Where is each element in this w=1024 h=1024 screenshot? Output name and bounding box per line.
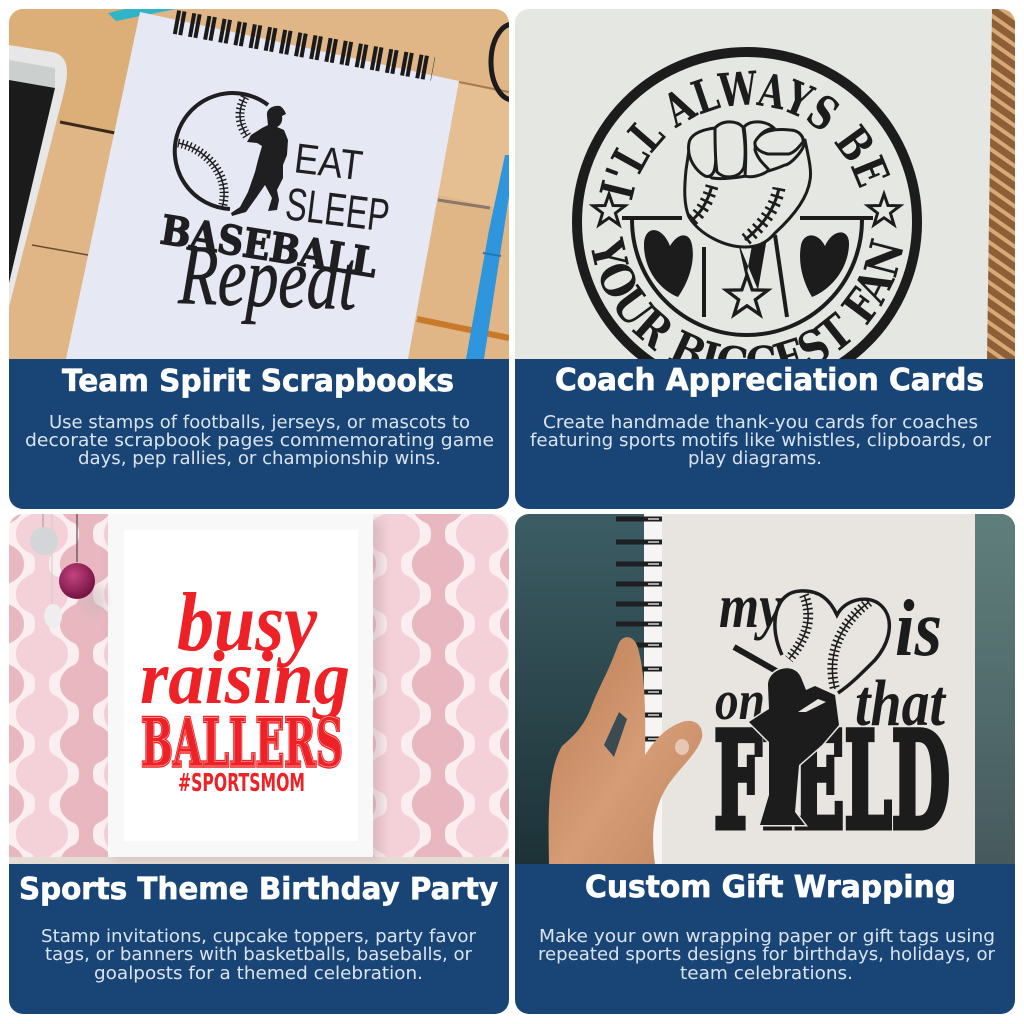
slogan lettering <box>714 573 950 859</box>
description: goalposts for a themed celebration. <box>94 964 423 984</box>
caption panel <box>515 864 1015 1014</box>
red slogan lettering: busy <box>177 576 318 669</box>
slogan lettering: SLEEP <box>283 177 392 242</box>
heading: Custom Gift Wrapping <box>585 870 956 905</box>
icon: left heart <box>644 230 693 297</box>
description <box>530 413 992 469</box>
red slogan lettering: #SPORTSMOM <box>178 768 305 797</box>
description: decorate scrapbook pages commemorating game <box>25 431 494 451</box>
red slogan lettering <box>142 592 348 792</box>
icon: batter silhouette <box>231 106 288 216</box>
description: play diagrams. <box>688 449 822 469</box>
phone <box>9 45 67 307</box>
caption panel <box>515 359 1015 509</box>
spiral binding <box>616 519 662 739</box>
inner shield <box>622 218 873 335</box>
baseball logo <box>175 93 268 209</box>
badge stamp <box>572 47 922 359</box>
description <box>41 927 477 984</box>
slogan lettering: is <box>895 585 942 673</box>
photo: teal background <box>515 514 1015 864</box>
heading: Sports Theme Birthday Party <box>19 872 498 907</box>
notebook page <box>66 12 459 359</box>
glasses <box>488 22 509 102</box>
description: repeated sports designs for birthdays, holidays, or <box>538 945 996 965</box>
photo: paper background <box>515 9 1015 359</box>
caption panel <box>9 864 509 1014</box>
heart baseball logo <box>775 591 889 693</box>
slogan lettering: on <box>715 670 765 732</box>
description: Create handmade thank-you cards for coaches <box>543 413 978 433</box>
description: Make your own wrapping paper or gift tags using <box>539 927 995 947</box>
slogan lettering: EAT <box>292 134 365 189</box>
description: Use stamps of footballs, jerseys, or mascots to <box>49 413 470 433</box>
slogan lettering: my <box>719 573 782 641</box>
icon: batter silhouette with bat <box>734 647 839 825</box>
frame shadow <box>112 520 382 860</box>
curved text bottom: YOUR BIGGEST FAN <box>591 236 903 359</box>
red slogan lettering: BALLERS <box>141 704 343 782</box>
shelf edge <box>9 857 509 864</box>
curved text top: I'LL ALWAYS BE <box>599 70 890 200</box>
icon: raised fist with baseball <box>685 122 811 317</box>
spiral binding <box>175 22 433 69</box>
heading: Team Spirit Scrapbooks <box>62 364 454 399</box>
hanging ornaments <box>30 514 106 628</box>
slogan lettering: BASEBALL <box>157 206 380 287</box>
photo: patterned pink wall <box>9 514 509 858</box>
white picture frame <box>108 514 373 857</box>
hand holding notebook <box>549 637 702 864</box>
slogan lettering: that <box>855 667 946 740</box>
red slogan lettering: raising <box>140 636 350 720</box>
description: Stamp invitations, cupcake toppers, party favor <box>41 927 477 947</box>
notebook page <box>644 514 975 864</box>
blue pen <box>466 155 510 359</box>
description <box>25 413 494 469</box>
panel: Sports Theme Birthday Party <box>9 514 509 1014</box>
icon: left star <box>593 194 625 225</box>
icon: teal clip <box>108 9 176 21</box>
panel: Custom Gift Wrapping <box>515 514 1015 1014</box>
red slogan lettering: BALLERS <box>141 704 343 782</box>
icon: right star <box>868 194 900 225</box>
description: team celebrations. <box>680 964 853 984</box>
slogan lettering <box>157 134 392 328</box>
description: featuring sports motifs like whistles, clipboards, or <box>530 431 992 451</box>
panel: Team Spirit Scrapbooks <box>9 9 535 509</box>
icon: bottom star <box>726 275 768 315</box>
caption panel <box>9 359 509 509</box>
icon: right heart <box>800 232 849 297</box>
right teal strip <box>975 514 1015 864</box>
slogan lettering: Repeat <box>177 226 360 328</box>
photo: wooden desk <box>9 9 509 359</box>
description: days, pep rallies, or championship wins. <box>78 449 441 469</box>
description: tags, or banners with basketballs, baseballs, or <box>45 945 473 965</box>
rope edge <box>987 9 1015 359</box>
panel: Coach Appreciation Cards <box>515 9 1015 509</box>
heading: Coach Appreciation Cards <box>555 363 984 398</box>
description <box>538 927 996 984</box>
